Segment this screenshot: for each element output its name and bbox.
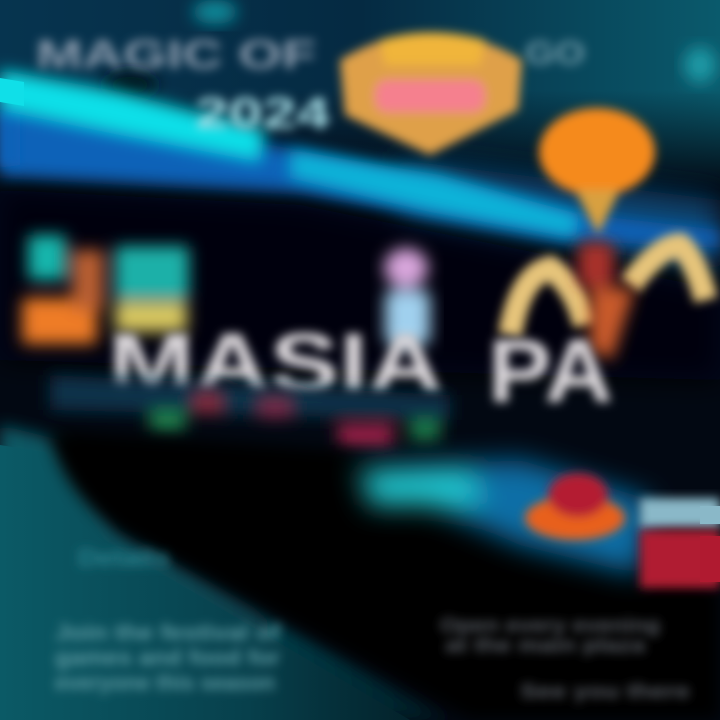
colour tiles [22, 235, 189, 344]
main title [108, 316, 613, 422]
cyan streak left [0, 70, 265, 162]
badge emblem [340, 32, 522, 155]
tile: orange strip [72, 250, 104, 310]
caption right block: at the main plaza [445, 635, 646, 657]
red box [640, 498, 720, 588]
tile: yellow [115, 302, 187, 332]
red figure [578, 242, 635, 360]
headline text: GO [525, 35, 585, 71]
caption left block: Join the festival of [55, 620, 281, 645]
caption left block: games and food for [55, 645, 280, 670]
caption left block [55, 620, 281, 695]
tile: orange [22, 298, 97, 344]
light bands [0, 70, 720, 248]
caption right block: See you there [520, 681, 690, 703]
main title: MASIA [108, 316, 443, 410]
caption right block [440, 615, 690, 703]
black diagonal band [50, 430, 720, 720]
icon: orange balloon [539, 108, 655, 235]
main title: PA [488, 322, 613, 422]
golden arches [510, 245, 706, 335]
figure [384, 248, 430, 345]
caption left small: Details [78, 545, 170, 572]
caption right block: Open every evening [440, 615, 660, 637]
food bowl [525, 473, 625, 540]
colour dots row [50, 375, 450, 445]
caption left block: everyone this season [55, 670, 275, 695]
cyan streak right [290, 150, 580, 238]
tile: teal small [28, 235, 66, 280]
headline text: 2024 [195, 89, 331, 138]
dark centre panel [0, 190, 720, 380]
blue band [0, 100, 720, 248]
headline text: MAGIC OF [36, 33, 316, 77]
headline text [36, 33, 585, 138]
blue lower panel [350, 460, 650, 575]
tile: teal large [115, 246, 189, 300]
